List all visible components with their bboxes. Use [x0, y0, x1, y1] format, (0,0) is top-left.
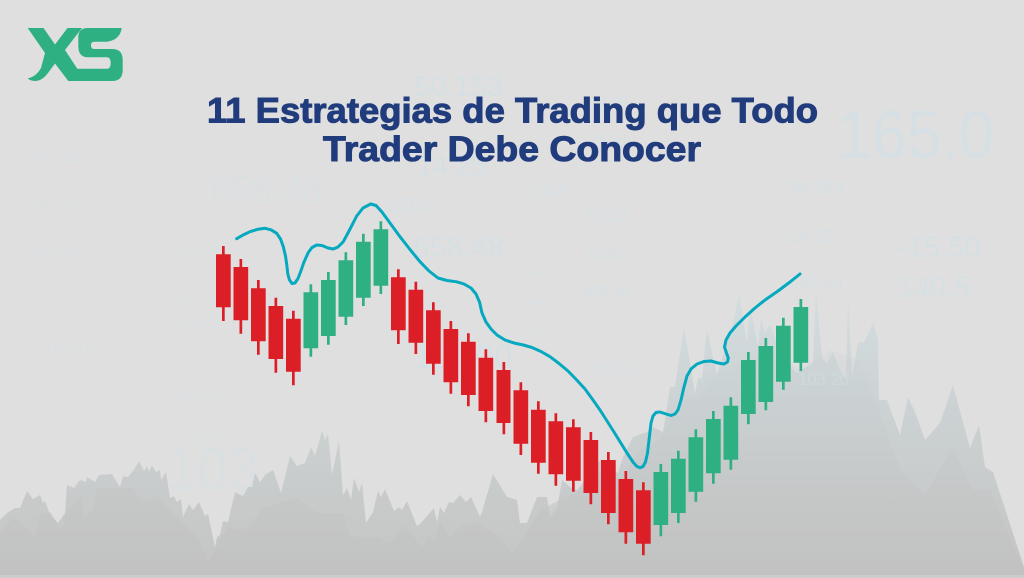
candlestick chart [216, 221, 808, 555]
background ghost numbers: -103.20 [527, 330, 546, 336]
background ghost numbers: 50.153 [177, 385, 229, 404]
background ghost numbers: 165.0 [177, 243, 220, 262]
background ghost numbers: 140.5 [533, 183, 567, 200]
background ghost numbers: 103.20 [414, 339, 512, 375]
title: 11 Estrategias de Trading que Todo [207, 92, 818, 130]
background ghost numbers: 658.48 [789, 273, 843, 293]
background ghost numbers: 50.153 [414, 71, 503, 103]
background ghost numbers: 14.25 [30, 196, 73, 215]
ghost number over mountain: 103.20 [798, 369, 849, 389]
background ghost numbers: 103 [167, 436, 258, 503]
background ghost numbers: 658.48 [527, 300, 544, 306]
background ghost numbers: 50.153 [30, 148, 82, 167]
background ghost numbers: 50.153 [586, 208, 628, 225]
red candles: first decline [216, 246, 301, 385]
red candles: long decline [391, 269, 651, 555]
background ghost numbers [30, 71, 994, 503]
teal trend line [237, 204, 800, 468]
title [207, 92, 818, 169]
logo: XS [28, 28, 123, 81]
background ghost numbers: 50.153 [527, 271, 544, 277]
background ghost numbers: 140.5 [177, 314, 220, 333]
background ghost numbers: 14.25 [178, 430, 218, 449]
background ghost numbers: 658.48 [585, 284, 629, 301]
background ghost numbers: 14.25 [587, 246, 621, 263]
background ghost numbers: 50.153 [788, 177, 843, 197]
background ghost numbers: -15.50 [897, 231, 981, 264]
green candles: first rally [304, 221, 388, 357]
background ghost numbers: 15.50 [387, 196, 428, 217]
background ghost numbers: 14.25 [789, 226, 833, 246]
background ghost numbers: 14.25 [527, 286, 541, 292]
background ghost numbers: -103.20 [32, 338, 89, 357]
background ghost numbers: 15.50 [591, 132, 626, 149]
background ghost numbers: 165.0 [837, 97, 994, 173]
background ghost numbers: 658.48 [30, 243, 82, 262]
green candles: recovery rally [654, 299, 808, 536]
background ghost numbers: -15.50 [177, 291, 225, 310]
background ghost numbers: 14.25 [590, 95, 630, 112]
background ghost numbers: 140.5 [898, 271, 970, 304]
background ghost numbers: 658.48 [413, 232, 504, 264]
background ghost numbers: 14.25 [417, 150, 486, 182]
background ghost numbers: 658.48 [210, 169, 323, 210]
background ghost numbers: -103.20 [586, 361, 634, 378]
background mountain area chart [0, 290, 1024, 578]
title: Trader Debe Conocer [323, 130, 701, 169]
